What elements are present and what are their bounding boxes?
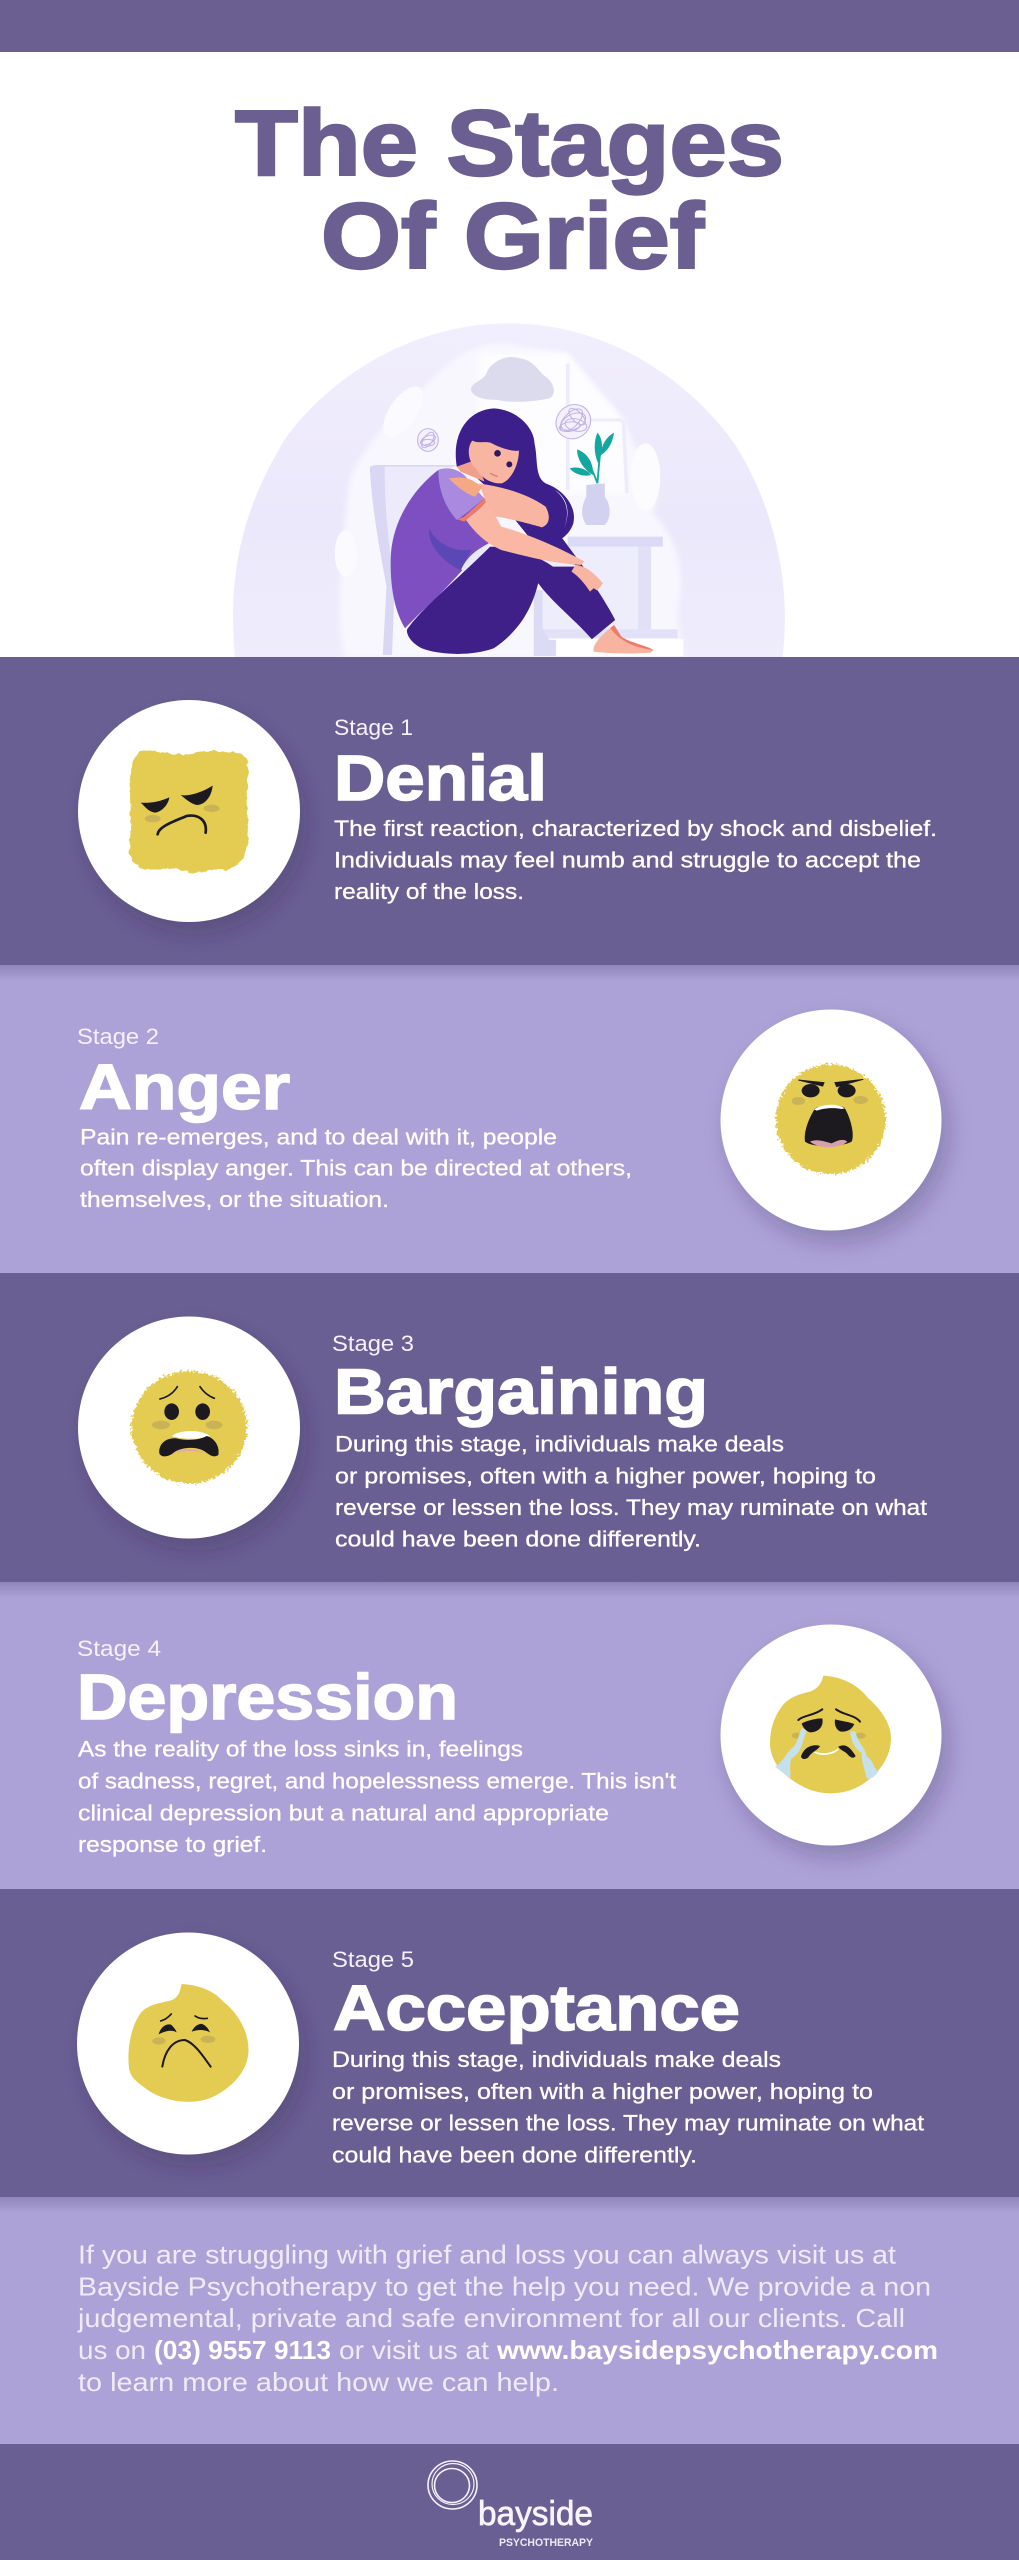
panel: stage 5 acceptance (0, 1889, 1019, 2197)
logo: bayside psychotherapy: bayside (478, 2495, 593, 2533)
stage label: Stage 4 (77, 1636, 161, 1661)
closing paragraph: us on (78, 2335, 146, 2365)
description: Pain re-emerges, and to deal with it, people (80, 1124, 557, 1150)
emoji circle: acceptance (77, 1932, 299, 2154)
closing paragraph: or visit us at (339, 2335, 490, 2365)
emoji circle: denial (78, 700, 300, 922)
panel: stage 4 depression (0, 1582, 1019, 1889)
title (235, 91, 784, 288)
description (334, 816, 937, 904)
panel: stage 3 bargaining (0, 1273, 1019, 1582)
description: could have been done differently. (335, 1526, 701, 1552)
description (78, 1736, 676, 1857)
description: often display anger. This can be directed at others, (80, 1156, 632, 1180)
stage label: Stage 1 (334, 715, 413, 740)
description: Individuals may feel numb and struggle to accept the (334, 848, 921, 872)
description: reverse or lessen the loss. They may ruminate on what (332, 2110, 924, 2136)
description: reverse or lessen the loss. They may ruminate on what (335, 1495, 927, 1520)
description: During this stage, individuals make deals (335, 1432, 784, 1456)
closing paragraph (77, 2240, 938, 2397)
closing paragraph: (03) 9557 9113 (154, 2335, 331, 2365)
description (80, 1124, 632, 1212)
emoji circle: depression (720, 1624, 942, 1846)
title: Of Grief (321, 184, 705, 288)
description: of sadness, regret, and hopelessness emerge. This isn't (78, 1768, 676, 1794)
heading: Bargaining (334, 1356, 708, 1428)
icon: scribbled thoughts (418, 400, 596, 451)
heading: Anger (79, 1051, 290, 1123)
heading: Acceptance (333, 1972, 740, 2044)
emoji circle: bargaining (78, 1316, 300, 1538)
heading: Depression (77, 1661, 458, 1733)
description (335, 1432, 927, 1552)
closing paragraph: If you are struggling with grief and loss you can always visit us at (78, 2240, 897, 2270)
description (332, 2047, 924, 2168)
icon: rain cloud (471, 357, 554, 402)
description: The first reaction, characterized by shock and disbelief. (334, 816, 937, 841)
description: During this stage, individuals make deals (332, 2047, 781, 2072)
stage label: Stage 5 (332, 1947, 414, 1972)
description: or promises, often with a higher power, hoping to (332, 2079, 873, 2104)
closing paragraph: Bayside Psychotherapy to get the help you need. We provide a non (78, 2272, 931, 2302)
stage label: Stage 2 (77, 1024, 159, 1049)
closing paragraph: judgemental, private and safe environment for all our clients. Call (77, 2303, 905, 2333)
panel: stage 1 denial (0, 657, 1019, 965)
emoji circle: anger (720, 1010, 942, 1230)
description: As the reality of the loss sinks in, feelings (78, 1736, 523, 1762)
footer band with logo (0, 2444, 1019, 2560)
top band (0, 0, 1019, 52)
illustration: sad woman sitting under a cloud (233, 323, 785, 657)
panel: call to action (0, 2197, 1019, 2444)
description: response to grief. (78, 1832, 267, 1857)
closing paragraph: www.baysidepsychotherapy.com (496, 2335, 938, 2365)
description: reality of the loss. (334, 879, 524, 904)
logo: bayside psychotherapy (428, 2461, 594, 2549)
stage label: Stage 3 (332, 1331, 414, 1356)
description: or promises, often with a higher power, hoping to (335, 1464, 876, 1488)
description: could have been done differently. (332, 2142, 697, 2168)
description: themselves, or the situation. (80, 1187, 389, 1212)
title: The Stages (235, 91, 784, 195)
heading: Denial (334, 742, 547, 814)
description: clinical depression but a natural and appropriate (78, 1800, 609, 1826)
logo: bayside psychotherapy: PSYCHOTHERAPY (499, 2537, 594, 2549)
panel: stage 2 anger (0, 965, 1019, 1273)
closing paragraph: to learn more about how we can help. (78, 2367, 559, 2397)
woman figure (391, 408, 654, 654)
